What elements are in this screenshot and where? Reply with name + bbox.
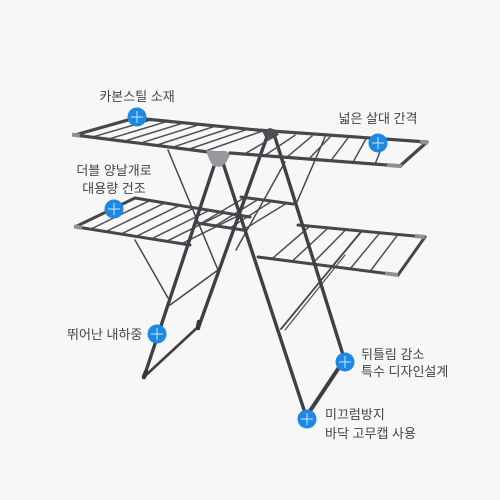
top rack slats bbox=[92, 120, 385, 164]
marker: carbon steel bbox=[128, 108, 146, 126]
drying rack illustration bbox=[72, 118, 428, 416]
central hub joints bbox=[206, 128, 279, 167]
callout: anti-slip rubber caps: 미끄럼방지 bbox=[325, 407, 385, 422]
callout: carbon steel material: 카본스틸 소재 bbox=[99, 89, 175, 104]
callout: double wings large capacity bbox=[76, 163, 152, 218]
callout: wide rod spacing: 넓은 살대 간격 bbox=[339, 111, 417, 126]
top rack rails bbox=[75, 118, 427, 166]
callout: carbon steel material bbox=[99, 89, 175, 126]
marker: anti-slip caps bbox=[298, 410, 316, 428]
callout: load capacity: 뛰어난 내하중 bbox=[67, 327, 142, 342]
lower rack slats bbox=[92, 198, 398, 272]
thin braces bbox=[135, 137, 360, 330]
callout: anti-slip rubber caps bbox=[298, 407, 416, 441]
callout: reduced warping design: 특수 디자인설계 bbox=[361, 364, 448, 379]
foot pads bbox=[144, 322, 199, 377]
legs bbox=[144, 134, 344, 416]
callout: double wings large capacity: 더블 양날개로 bbox=[76, 163, 152, 178]
marker: warping design bbox=[336, 352, 354, 372]
rail end caps bbox=[72, 135, 428, 275]
lower rack rails bbox=[77, 197, 425, 275]
callout: load capacity bbox=[67, 324, 166, 344]
marker: double wings bbox=[104, 200, 124, 218]
callout: double wings large capacity: 대용량 건조 bbox=[82, 181, 146, 196]
callout: reduced warping design: 뒤틀림 감소 bbox=[361, 347, 424, 362]
marker: rod spacing bbox=[368, 134, 388, 152]
marker: load capacity bbox=[148, 324, 166, 344]
callout: reduced warping design bbox=[336, 347, 448, 379]
callout: wide rod spacing bbox=[339, 111, 417, 152]
callout: anti-slip rubber caps: 바닥 고무캡 사용 bbox=[325, 426, 416, 441]
